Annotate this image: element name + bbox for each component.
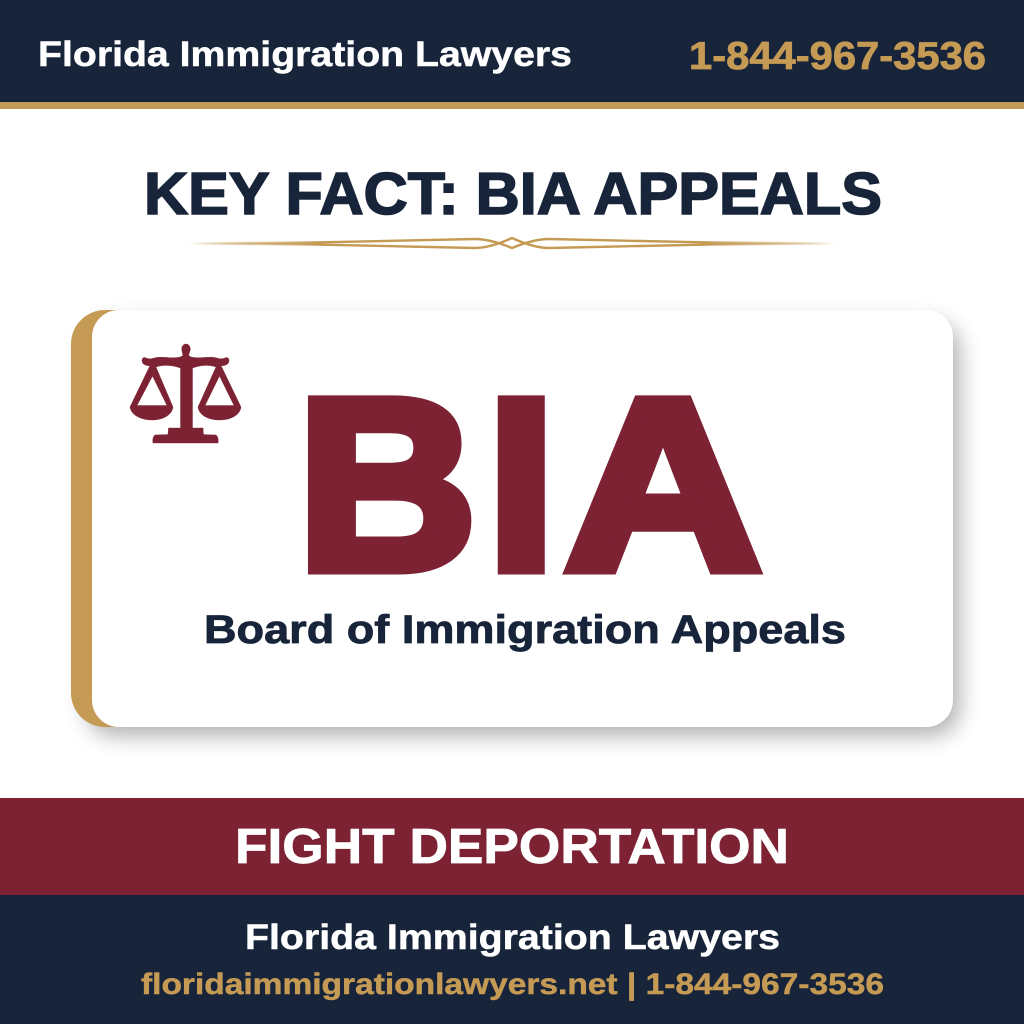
footer firm name: Florida Immigration Lawyers	[245, 918, 780, 957]
white card face	[92, 310, 953, 727]
BIA large letters: B	[298, 350, 476, 620]
banner: fight deportation	[0, 798, 1024, 895]
icon: scales of justice	[130, 344, 241, 443]
footer website and phone: floridaimmigrationlawyers.net | 1-844-967-3536	[141, 968, 884, 1001]
header firm name: Florida Immigration Lawyers	[38, 35, 572, 74]
BIA large letters	[298, 350, 761, 620]
footer band	[0, 895, 1024, 1024]
BIA large letters: A	[565, 350, 761, 620]
ornamental divider	[188, 238, 836, 248]
top header band	[0, 0, 1024, 109]
title: KEY FACT: BIA APPEALS	[144, 161, 882, 227]
card subtitle: Board of Immigration Appeals	[204, 608, 846, 652]
panel: BIA card	[71, 310, 960, 736]
gold card edge	[71, 310, 191, 727]
banner: fight deportation: FIGHT DEPORTATION	[235, 820, 789, 874]
header phone number: 1-844-967-3536	[689, 35, 986, 78]
BIA large letters: I	[488, 350, 555, 620]
card shadow	[86, 322, 960, 736]
